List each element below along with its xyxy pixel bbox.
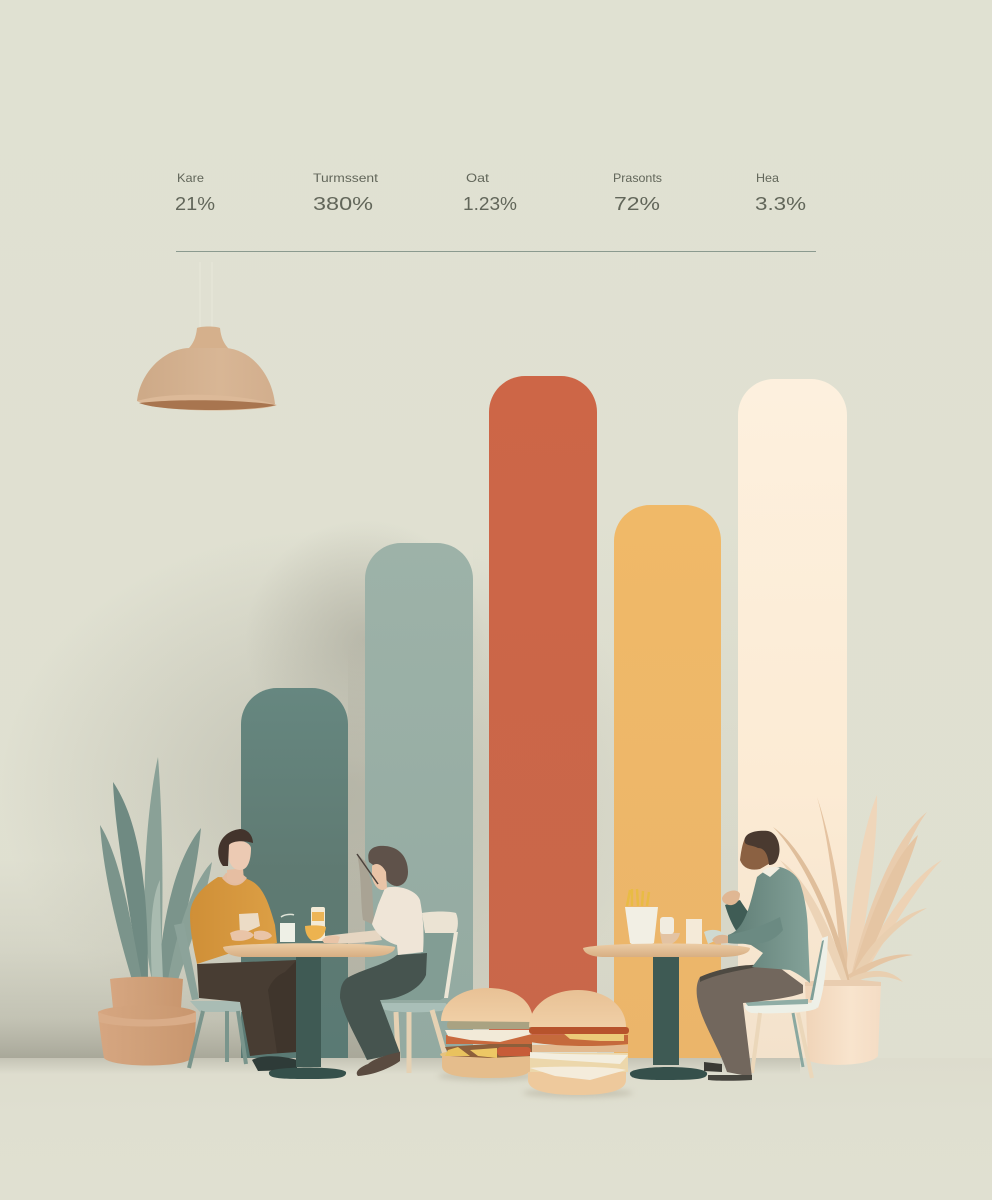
chair: right — [377, 912, 458, 1073]
wall shadow behind bars — [0, 520, 738, 1060]
chair — [745, 936, 828, 1078]
right table group — [583, 795, 942, 1081]
stat: Hea: 3.3% — [755, 193, 806, 214]
person: man in green sweater — [697, 831, 810, 1081]
bar 2: sage — [365, 543, 473, 1058]
stat: Oat: Oat — [466, 171, 490, 185]
drinks on table — [280, 907, 326, 942]
stat: Prasonts: 72% — [614, 193, 660, 214]
left table group — [174, 829, 458, 1079]
table top and stem — [583, 944, 750, 1080]
person: woman in cream sweater — [322, 846, 427, 1076]
bar 3: terracotta — [489, 376, 597, 1040]
bar 5: cream — [738, 379, 847, 1060]
icon: pendant lamp — [137, 262, 277, 411]
food on table — [625, 889, 726, 945]
chair: left — [174, 923, 281, 1068]
burger: back — [438, 988, 538, 1081]
stat: Kare: 21% — [175, 193, 215, 214]
stat: Oat — [463, 171, 517, 214]
icon: burgers — [438, 988, 633, 1098]
bar 4: amber — [614, 505, 721, 1060]
icon: snake plant in terracotta pots — [98, 757, 212, 1066]
stat: Hea — [755, 171, 806, 214]
stat: Oat: 1.23% — [463, 193, 517, 214]
stat: Prasonts: Prasonts — [613, 171, 662, 185]
stat: Turmssent: 380% — [313, 193, 373, 214]
stat: Turmssent: Turmssent — [313, 171, 379, 185]
person: man in mustard sweater — [190, 829, 297, 1071]
stat: Prasonts — [613, 171, 662, 214]
floor — [0, 1058, 992, 1200]
icon: feather palm in cream pot — [773, 795, 942, 1065]
stat: Hea: Hea — [756, 171, 779, 185]
stats row — [175, 171, 806, 214]
stat: Kare — [175, 171, 215, 214]
stat: Turmssent — [313, 171, 379, 214]
pot — [805, 982, 881, 1065]
stat: Kare: Kare — [177, 171, 204, 185]
table top and stem — [223, 943, 395, 1079]
pots — [110, 977, 183, 1008]
bar 1: dark teal — [241, 688, 348, 1058]
burger: front — [523, 990, 633, 1098]
bar chart — [241, 376, 847, 1060]
